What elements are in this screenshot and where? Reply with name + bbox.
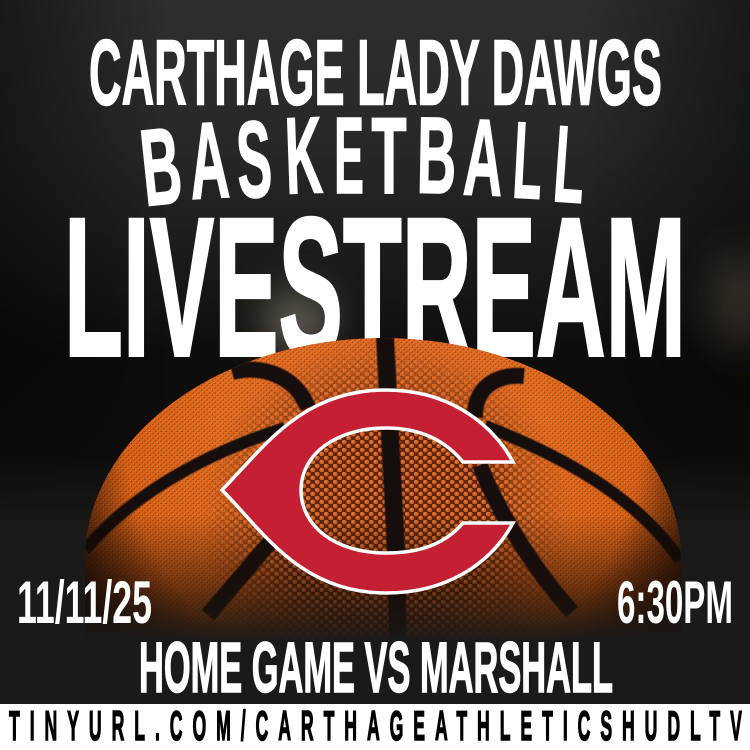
url text: TINYURL.COM/CARTHAGEATHLETICSHUDLTV	[9, 702, 742, 749]
heading: Basketball: S	[234, 99, 275, 222]
heading: Basketball	[135, 95, 589, 230]
heading: Basketball: E	[334, 95, 364, 217]
heading: Basketball: T	[371, 96, 407, 217]
heading: Basketball: K	[283, 95, 324, 218]
logo: red C	[222, 390, 513, 593]
heading: Basketball: A	[461, 97, 505, 220]
heading: Basketball: B	[416, 95, 457, 217]
url bar	[0, 702, 750, 750]
date: 11/11/25	[17, 569, 152, 636]
basketball seams	[85, 336, 680, 640]
basketball	[85, 338, 681, 638]
heading: Basketball: B	[135, 105, 187, 230]
heading: Basketball: A	[186, 100, 232, 223]
heading: Basketball: L	[550, 102, 589, 226]
heading: Basketball: L	[510, 99, 546, 222]
